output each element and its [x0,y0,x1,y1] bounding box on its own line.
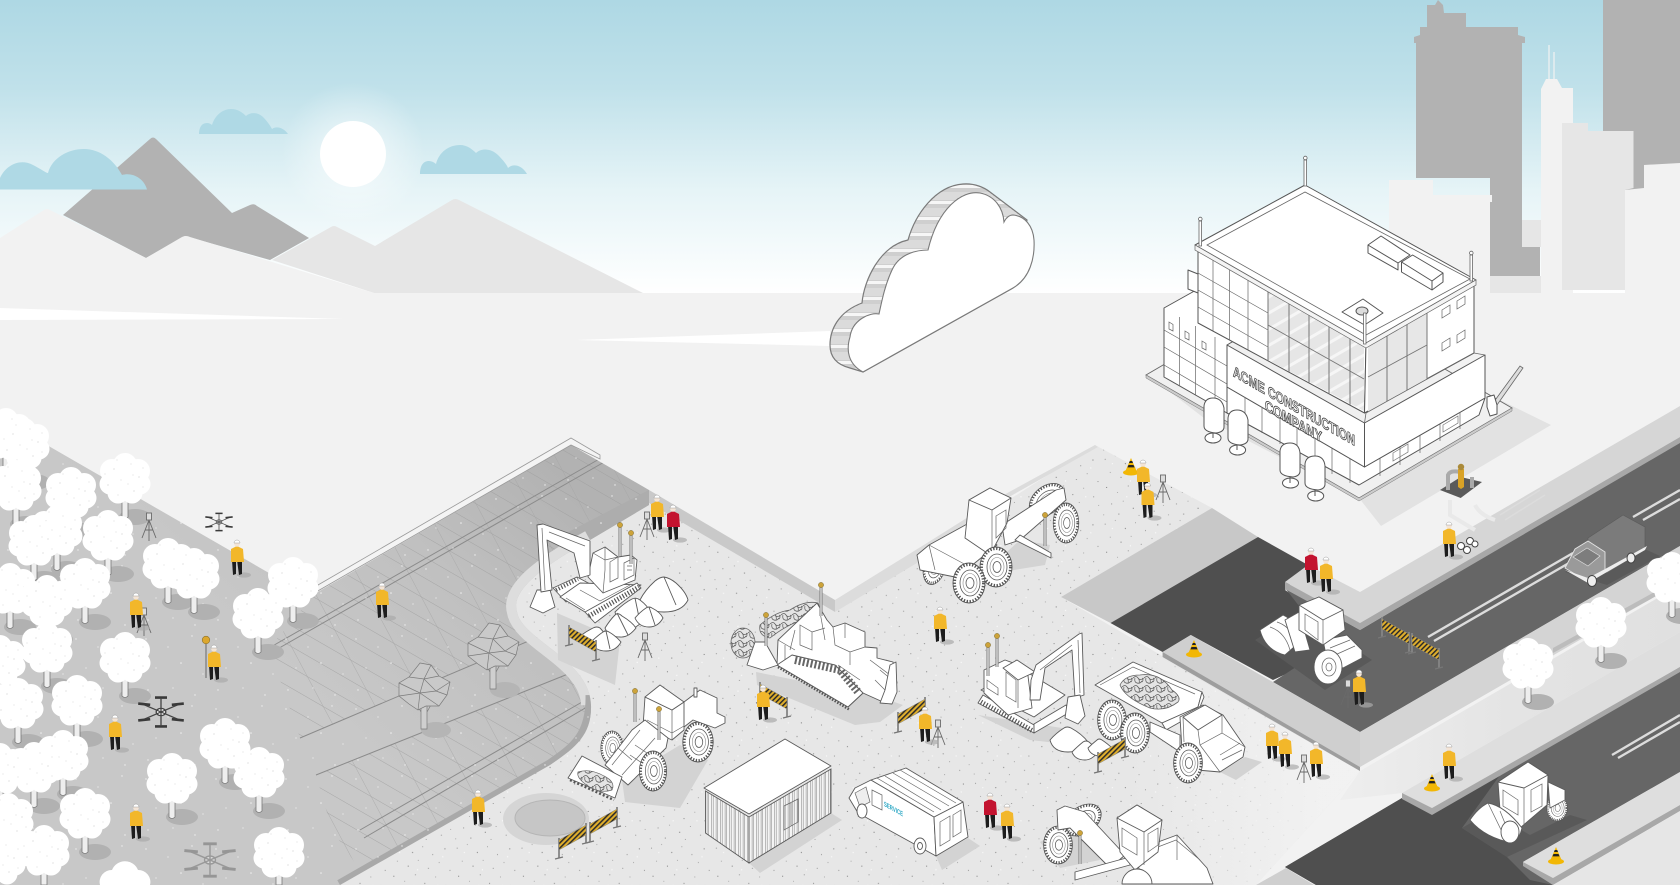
blade [1015,535,1051,558]
bucket [530,590,555,613]
cone [1123,458,1139,476]
barrier [1408,633,1443,669]
cloud extrusion [830,184,1027,372]
cloud front face [848,193,1034,372]
white ground streak centre [576,331,830,346]
ground floor [1227,387,1485,485]
upper grader antenna [1042,512,1048,546]
company name sign: COMPANY [1265,398,1322,447]
skyline: dark tower [1414,0,1540,276]
tree [234,747,285,819]
worker [1443,744,1463,782]
excavation pit [503,793,589,845]
worker [651,495,671,533]
roller frame [1285,612,1310,652]
pile [615,598,650,630]
tree [8,742,60,814]
worker [130,804,150,842]
frame [1057,806,1125,868]
upper road [1273,442,1680,732]
tree [1576,597,1627,669]
barrier [894,697,929,733]
paving base band [1061,508,1258,623]
van service label: SERVICE [884,799,903,818]
tree [60,558,111,630]
delivery truck [1565,515,1660,586]
bed [1095,662,1202,723]
outlined field edge strip [316,438,600,592]
cab [643,697,684,740]
road roller upper [1260,597,1362,684]
skyline: dark block right [1603,0,1680,190]
site workers [109,460,1463,842]
tree [46,467,97,539]
worker [472,790,492,828]
worker [1310,742,1330,780]
survey drones [138,513,236,876]
tripod [137,608,151,636]
tree [0,408,32,480]
sun [281,82,425,226]
roller hood [1323,635,1362,668]
engine hood [917,523,997,577]
near front wheel [1053,503,1079,543]
chassis [981,668,1065,717]
tree [100,453,151,525]
roadside trees [1502,552,1680,710]
signage fascia [1227,345,1485,467]
tree [100,632,151,704]
tree [8,515,60,587]
distant skyline [1389,0,1680,293]
near track [585,583,641,623]
front wheel [639,751,667,791]
base plate [1146,285,1512,498]
worker [1279,732,1299,770]
dark peak [63,138,309,260]
frame beam [1002,488,1066,545]
small cloud right of sun [420,145,527,174]
worker [1320,557,1340,595]
excavator right [978,633,1085,733]
verge strip [1360,546,1680,767]
field base [0,418,649,885]
body [777,603,897,707]
tripod [638,633,652,661]
tree [200,718,251,790]
traffic cones [1123,458,1564,864]
roller rear wheel [1547,795,1567,821]
right excavator antennas [985,633,1000,676]
tree lawn band [1340,585,1680,800]
site container [704,739,831,863]
entrance planters [1204,398,1325,501]
gps survey pole [202,636,210,678]
front wheel [1174,743,1202,783]
lower kerb far side [1523,772,1680,885]
upper rear annex [1188,270,1198,293]
gravel fade toward path [1130,640,1360,885]
excavator left [530,524,641,623]
white ground streak left [0,308,344,320]
thin cloud 3D icon [830,184,1034,372]
ground plane [0,293,1680,885]
chassis [560,583,641,615]
worker [934,607,954,645]
motor grader upper [917,477,1079,603]
mesh triangles [287,470,630,724]
lower block left face [1164,289,1260,413]
cab [984,660,1032,715]
body detail [778,612,892,690]
worker [376,583,396,621]
roller shadow on asphalt [1255,612,1372,690]
lower road [1285,667,1680,885]
lower lane markings [1612,715,1680,758]
roof [1195,185,1476,348]
motor grader lower [1044,797,1213,884]
drone small [205,513,233,531]
far track [553,577,592,602]
tree [0,793,34,865]
worker [231,540,251,578]
tree [0,635,26,707]
mesh hatching lower [320,678,584,860]
wheel loader [568,685,725,800]
barrier [1378,617,1413,653]
rear wheel [683,722,713,762]
tripod [1297,755,1311,783]
road roller lower [1470,762,1567,843]
tree [0,460,42,532]
machine ground shadows [557,540,1262,873]
front mid wheel [953,563,985,603]
worker [130,593,150,631]
dark lower rim [340,695,591,885]
bulldozer [731,602,897,710]
upper kerb [1285,406,1680,630]
roller shadow lower [1462,812,1587,857]
worker [1266,724,1286,762]
cone [1186,640,1202,658]
near track [978,695,1034,733]
worker [208,645,228,683]
cab [1117,805,1162,870]
white specks [7,457,637,884]
boom arm [1030,633,1084,700]
barrier [756,682,791,718]
bucket [1065,695,1085,724]
tripod [1341,680,1355,708]
tree [32,505,83,577]
side sidewalk left arm [1163,635,1360,771]
loader antennas [632,688,662,740]
road lane markings upper [1428,490,1680,641]
tree [168,548,220,620]
far front wheel [1023,477,1071,523]
load [1120,675,1179,709]
roof plant unit 1 [1368,236,1410,270]
large blue cloud [0,149,147,190]
exhaust [694,688,697,697]
cab roof [645,685,684,710]
near front wheel [1044,826,1072,864]
tree [0,678,44,750]
surveyed field [0,418,660,885]
barrier [1094,737,1129,773]
loader arm [605,720,668,785]
tree at bottom edge [254,827,304,885]
pile [640,577,688,612]
chassis [1150,722,1180,752]
worker red [984,793,1004,831]
tripod [1156,475,1170,503]
service van [849,768,968,856]
worker [1353,670,1373,708]
rear wheel [919,543,951,587]
office building [1146,156,1512,501]
tree crown at bottom edge [0,834,26,884]
roller rear drum [1260,615,1302,655]
far front wheel [601,731,623,765]
cone [1548,847,1564,864]
worker [1137,460,1157,498]
tree [0,418,50,490]
pile [1072,741,1098,760]
worker red [667,505,687,543]
skyline: antenna tower [1541,45,1573,293]
bottom kerb wedge [1256,868,1314,885]
small cloud centre-left [199,109,288,134]
tree [22,622,73,694]
inner light curve [516,540,591,705]
blade [1075,857,1130,880]
gravel piles [579,577,688,651]
roof plant unit 2 [1402,255,1443,290]
utility hydrant and pipes [1440,464,1545,530]
barrier [555,823,590,859]
tree [0,563,36,635]
forest [0,408,319,885]
bucket rocks [578,771,613,791]
tree [82,510,134,582]
cab [588,547,637,593]
tree [142,538,194,610]
worker [1142,483,1162,521]
skyline: pale low blocks [1490,220,1541,293]
pile [1088,739,1112,756]
pile [579,627,606,645]
building ground shadow [1170,392,1551,526]
tripod [640,512,654,540]
small utility robot [1458,538,1478,554]
mountains [0,138,643,310]
roller cab [1498,762,1548,828]
barrier [565,625,600,661]
top rocks [760,602,819,638]
rear wheels [1098,700,1126,740]
tree [38,730,89,802]
pile [605,613,636,637]
gravel work area [330,445,1360,885]
mid wheel [1122,869,1152,884]
parking barrier [1487,366,1523,416]
pile [591,631,621,651]
gravel piles right [1050,727,1112,760]
sky background [0,0,1680,294]
company name sign: ACME CONSTRUCTION [1233,364,1355,450]
mesh hatching upper [277,450,588,640]
roof poles [1198,156,1473,344]
far front wheel [1059,797,1107,843]
cab [965,488,1011,555]
pile [1050,727,1088,752]
blade [747,642,778,670]
tail [1162,692,1204,730]
roof fan [1342,299,1383,325]
tree [0,743,26,815]
tripod [931,720,945,748]
roller drum [1470,803,1522,843]
skyline: right block [1625,163,1680,293]
hazard barriers [555,617,1443,859]
upper block right wall [1364,283,1474,413]
retaining wall [649,445,1098,612]
lower kerb upper side [1402,632,1680,815]
bulldozer antennas [763,582,824,646]
pile [635,607,663,627]
worker [919,707,939,745]
tripod [142,513,156,541]
tree [268,557,319,629]
tree [60,788,111,860]
worker [1001,804,1021,842]
skyline: pale block left [1389,180,1492,293]
hood and cab [1180,705,1245,772]
tree at bottom edge [18,825,70,885]
wireframe survey tree [468,623,520,698]
blade rocks [731,628,755,658]
tree [22,575,73,647]
tree [52,675,103,747]
tree [146,753,198,825]
tree [1646,552,1680,624]
lower grader antenna [1077,830,1083,864]
articulated dump truck [1095,662,1245,783]
roller cab [1299,597,1345,645]
mesh hatching middle [269,458,649,738]
worker [109,715,129,753]
roller front drum [1314,650,1342,684]
top rim [568,495,648,552]
upper block left wall [1198,250,1366,413]
track [777,655,863,707]
ripper [880,662,897,704]
tree crown at bottom edge [100,861,150,885]
fresh asphalt junction [1110,537,1360,680]
boom arm [537,524,590,592]
cone [1424,774,1440,792]
barrier [586,807,621,843]
bottom right verge [1553,811,1680,885]
worker [1443,522,1463,560]
far track [1034,705,1070,733]
mid wheel [980,547,1012,587]
drone large [138,698,184,726]
verge dark edge [1553,590,1658,653]
bucket [568,756,622,798]
survey tripods [137,475,1355,783]
left foothills [0,209,374,310]
worker red [1305,548,1325,586]
wireframe survey tree [399,663,451,738]
tree [232,588,284,660]
right peaks [272,199,643,293]
skyline: mid tower [1562,123,1634,290]
engine [1135,835,1213,884]
engine housing [672,690,725,735]
drone shadow [184,844,236,876]
worker [757,685,777,723]
excavator left antennas [617,522,634,564]
tree [1502,638,1554,710]
lower road dark patch [1285,775,1553,885]
field guide lines [269,458,606,838]
